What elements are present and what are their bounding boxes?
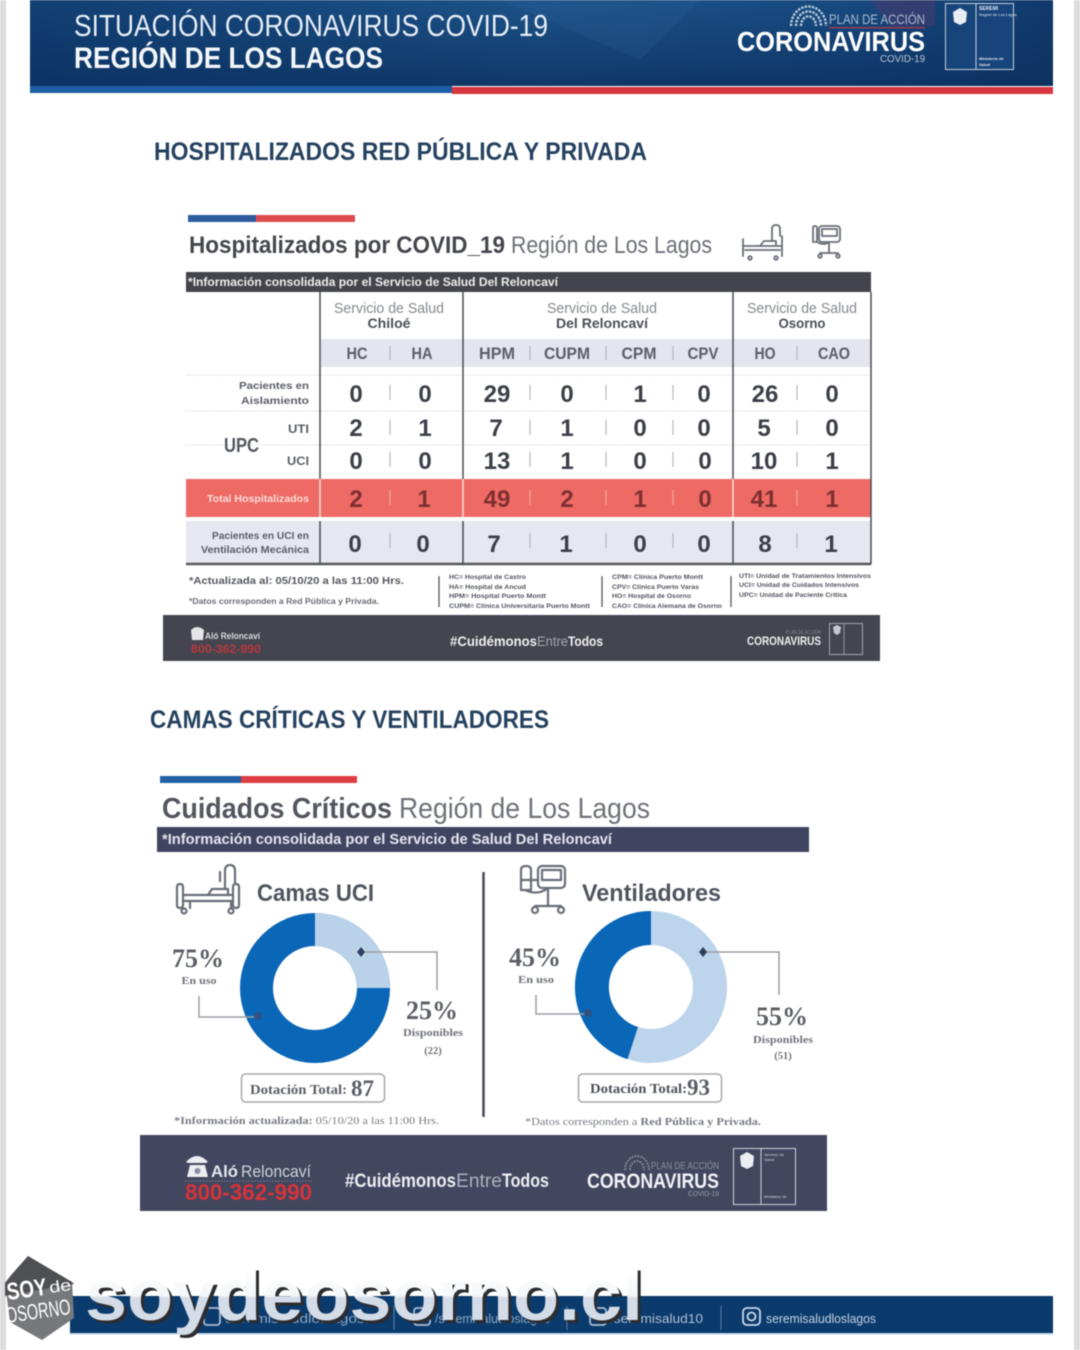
callout: 55% disponibles: Disponibles bbox=[753, 1035, 813, 1046]
row: total hospitalizados: 1 bbox=[633, 486, 647, 513]
column codes: CUPM bbox=[544, 344, 590, 363]
footer band: cuidados críticos: Todos bbox=[502, 1171, 549, 1192]
row: UTI: 1 bbox=[560, 415, 574, 442]
donut chart: ventiladores bbox=[575, 911, 710, 1059]
footer band: cuidados críticos: Salud bbox=[764, 1157, 774, 1162]
column header band bbox=[321, 339, 871, 367]
row: total hospitalizados: 1 bbox=[825, 486, 839, 513]
service headers: Servicio de Salud bbox=[334, 300, 444, 317]
callout: 55% disponibles: (51) bbox=[774, 1051, 792, 1062]
panel title: Cuidados Críticos bbox=[162, 793, 392, 825]
info bar bbox=[157, 827, 809, 852]
info bar: *Información consolidada por el Servicio de Salud Del Reloncaví bbox=[162, 832, 613, 848]
dotación total: ventiladores: 93 bbox=[687, 1075, 710, 1100]
icon: hospital bed bbox=[743, 225, 782, 260]
row: UCI: 1 bbox=[825, 448, 839, 475]
callout: 55% disponibles bbox=[699, 947, 813, 1062]
header logo: plan de acción coronavirus bbox=[737, 6, 925, 65]
callout: 25% disponibles: Disponibles bbox=[403, 1028, 463, 1039]
row: ventilación mecánica: 8 bbox=[758, 531, 772, 558]
heading: camas críticas: CAMAS CRÍTICAS Y VENTILADORES bbox=[150, 705, 549, 734]
column codes: CPM bbox=[622, 344, 656, 363]
header title: SITUACIÓN CORONAVIRUS COVID-19 bbox=[74, 8, 548, 43]
panel title: Región de Los Lagos bbox=[511, 232, 712, 259]
legend: abbreviations: HPM= Hospital Puerto Montt bbox=[449, 594, 546, 600]
row: UTI: 7 bbox=[489, 415, 503, 442]
callout: 25% disponibles: (22) bbox=[424, 1046, 442, 1057]
callout: 75% en uso bbox=[172, 944, 262, 1020]
legend: abbreviations: UCI= Unidad de Cuidados Intensivos bbox=[739, 583, 860, 589]
row: ventilación mecánica: Ventilación Mecánica bbox=[201, 545, 309, 556]
row: UTI bbox=[349, 415, 839, 442]
legend: abbreviations: HO= Hospital de Osorno bbox=[612, 594, 691, 600]
legend: abbreviations: CUPM= Clínica Universitaria Puerto Montt bbox=[449, 604, 590, 610]
footer band: cuidados críticos: 800-362-990 bbox=[185, 1179, 312, 1205]
header logo: ministerio de salud: Región de Los Lagos bbox=[979, 12, 1017, 17]
footer social bar: seremisaludloslagos bbox=[766, 1311, 876, 1326]
dotación total: ventiladores: Dotación Total: bbox=[590, 1082, 687, 1097]
row: ventilación mecánica: 1 bbox=[559, 531, 573, 558]
header logo: plan de acción coronavirus: COVID-19 bbox=[880, 54, 925, 65]
row: ventilación mecánica: 0 bbox=[416, 531, 430, 558]
legend: abbreviations: HC= Hospital de Castro bbox=[449, 575, 526, 581]
footer band: table: Entre bbox=[537, 634, 568, 649]
row labels: UTI bbox=[288, 422, 309, 436]
row: UCI: 0 bbox=[349, 448, 363, 475]
row: UCI: 0 bbox=[633, 448, 647, 475]
legend: abbreviations: CPM= Clínica Puerto Montt bbox=[612, 575, 703, 581]
footer band: table: CORONAVIRUS bbox=[747, 636, 821, 648]
row: UTI: 0 bbox=[633, 415, 647, 442]
footer band: cuidados críticos: PLAN DE ACCIÓN bbox=[651, 1159, 719, 1172]
accent rule bbox=[160, 776, 357, 783]
service headers: Chiloé bbox=[368, 315, 411, 331]
row: ventilación mecánica: 0 bbox=[348, 531, 362, 558]
logo: soy de osorno bbox=[4, 1256, 74, 1340]
row: UCI: 0 bbox=[698, 448, 712, 475]
legend: abbreviations: CAO= Clínica Alemana de Osorno bbox=[612, 604, 722, 610]
divider bbox=[482, 872, 485, 1117]
row labels: Aislamiento bbox=[241, 396, 309, 407]
callout: 45% en uso: En uso bbox=[518, 975, 554, 986]
info bar: *Información consolidada por el Servicio de Salud Del Reloncaví bbox=[188, 277, 559, 289]
panel title bbox=[162, 793, 650, 825]
row: total hospitalizados bbox=[186, 479, 871, 517]
icon: hospital bed bbox=[177, 865, 239, 914]
row: UTI: 0 bbox=[697, 415, 711, 442]
row: total hospitalizados: 2 bbox=[560, 486, 574, 513]
panel: hospitalizados table bbox=[163, 215, 880, 661]
footer social bar: /seremisalud10 bbox=[610, 1311, 703, 1326]
row: total hospitalizados: 49 bbox=[484, 486, 510, 513]
header logo: ministerio de salud bbox=[946, 4, 1017, 70]
header title: REGIÓN DE LOS LAGOS bbox=[74, 41, 383, 75]
column codes: HC bbox=[346, 344, 368, 363]
right page edge bbox=[1074, 0, 1080, 1350]
row: UTI: 5 bbox=[757, 415, 771, 442]
icons: social networks bbox=[204, 1308, 606, 1325]
icon: telephone bbox=[186, 1156, 208, 1177]
row: UCI: 13 bbox=[484, 448, 510, 475]
legend: abbreviations bbox=[439, 574, 872, 610]
row: pacientes en aislamiento: 26 bbox=[752, 381, 778, 408]
row: UCI: 1 bbox=[560, 448, 574, 475]
footer band: cuidados críticos: Entre bbox=[456, 1171, 502, 1192]
callout: 55% disponibles: 55% bbox=[756, 1002, 808, 1031]
footer band: cuidados críticos: COVID-19 bbox=[688, 1191, 719, 1198]
logo: soy de osorno: SOY bbox=[5, 1274, 48, 1306]
callout: 45% en uso: 45% bbox=[509, 943, 561, 972]
footer social bar: /seremisaludloslagos bbox=[435, 1311, 550, 1326]
column codes: HO bbox=[754, 344, 776, 363]
panel title: Región de Los Lagos bbox=[399, 793, 650, 825]
header logo: ministerio de salud: SEREMI bbox=[979, 6, 999, 12]
footer band: table: Aló Reloncaví bbox=[205, 631, 260, 641]
service headers: Servicio de Salud bbox=[747, 300, 857, 317]
footer social bar bbox=[70, 1296, 1053, 1334]
column codes: HA bbox=[412, 344, 432, 363]
info bar bbox=[186, 272, 871, 292]
row: total hospitalizados: 2 bbox=[349, 486, 363, 513]
callout: 75% en uso: 75% bbox=[172, 944, 224, 973]
service headers: Servicio de Salud bbox=[547, 300, 657, 317]
row: pacientes en aislamiento: 0 bbox=[560, 381, 574, 408]
service headers: Del Reloncaví bbox=[556, 315, 649, 331]
footnotes bbox=[189, 576, 404, 606]
row: ventilación mecánica: Pacientes en UCI en bbox=[212, 531, 309, 542]
column codes: CAO bbox=[818, 344, 850, 363]
dotación total: ventiladores bbox=[578, 1074, 722, 1102]
heading: hospitalizados: HOSPITALIZADOS RED PÚBLICA Y PRIVADA bbox=[154, 136, 647, 166]
row: UTI: 1 bbox=[418, 415, 432, 442]
panel title: Hospitalizados por COVID_19 bbox=[189, 232, 505, 259]
donut chart: camas uci bbox=[256, 913, 390, 1046]
callout: 45% en uso bbox=[509, 943, 592, 1017]
service headers: Osorno bbox=[778, 315, 826, 331]
header title bbox=[74, 8, 548, 75]
dotación total: camas: 87 bbox=[351, 1076, 374, 1101]
logo: soy de osorno: OSORNO bbox=[4, 1294, 72, 1328]
callout: 75% en uso: En uso bbox=[182, 976, 216, 987]
row: UCI bbox=[349, 448, 839, 475]
dotación total: camas bbox=[242, 1074, 384, 1102]
row labels: Pacientes en bbox=[239, 381, 309, 392]
row labels: UCI bbox=[287, 454, 309, 468]
footer band: cuidados críticos: Reloncaví bbox=[241, 1162, 311, 1181]
accent rule bbox=[188, 215, 355, 222]
footer social bar: seremisaludloslagos.cl bbox=[225, 1311, 380, 1326]
icon: ventilator bbox=[813, 226, 840, 258]
footer band: cuidados críticos bbox=[140, 1135, 827, 1211]
column codes: CPV bbox=[688, 344, 719, 363]
header logo: ministerio de salud: Salud bbox=[979, 62, 990, 67]
icon: instagram bbox=[743, 1308, 760, 1325]
label: ventiladores: Ventiladores bbox=[582, 880, 721, 907]
watermark: soydeosorno.cl: soydeosorno.cl bbox=[85, 1256, 643, 1336]
row: ventilación mecánica: 7 bbox=[487, 531, 501, 558]
legend: abbreviations: UTI= Unidad de Tratamientos Intensivos bbox=[739, 574, 872, 580]
icon: ventilator bbox=[521, 866, 565, 913]
column codes bbox=[346, 344, 850, 363]
footnotes: *Datos corresponden a Red Pública y Privada. bbox=[189, 597, 379, 606]
row: pacientes en aislamiento: 0 bbox=[825, 381, 839, 408]
row: pacientes en aislamiento: 0 bbox=[418, 381, 432, 408]
footer band: table: #Cuidémonos bbox=[450, 634, 537, 649]
panel title bbox=[189, 232, 712, 259]
row: UCI: 0 bbox=[418, 448, 432, 475]
row labels: UPC bbox=[224, 435, 259, 457]
row: UTI: 0 bbox=[825, 415, 839, 442]
footer band: table: Todos bbox=[568, 634, 603, 649]
legend: abbreviations: HA= Hospital de Ancud bbox=[449, 585, 526, 591]
row: total hospitalizados: 0 bbox=[698, 486, 712, 513]
footer band: cuidados críticos: Ministerio de bbox=[764, 1194, 787, 1199]
row labels bbox=[224, 381, 309, 468]
column codes: HPM bbox=[479, 344, 515, 363]
header banner bbox=[30, 0, 1053, 94]
row: pacientes en aislamiento: 1 bbox=[633, 381, 647, 408]
row: total hospitalizados: 41 bbox=[751, 486, 777, 513]
service headers bbox=[334, 300, 857, 331]
footer band: cuidados críticos: CORONAVIRUS bbox=[587, 1170, 719, 1193]
dotación total: camas: Dotación Total: bbox=[250, 1083, 347, 1098]
row: pacientes en aislamiento bbox=[349, 381, 839, 408]
label: camas uci: Camas UCI bbox=[257, 880, 374, 907]
row: UTI: 2 bbox=[349, 415, 363, 442]
callout: 25% disponibles: 25% bbox=[406, 996, 458, 1025]
row: pacientes en aislamiento: 29 bbox=[484, 381, 510, 408]
legend: abbreviations: UPC= Unidad de Paciente Crítica bbox=[739, 593, 848, 599]
row: ventilación mecánica: 0 bbox=[697, 531, 711, 558]
panel: cuidados críticos bbox=[140, 776, 827, 1211]
row: total hospitalizados: 1 bbox=[417, 486, 431, 513]
row: total hospitalizados: Total Hospitalizados bbox=[207, 494, 309, 505]
footer band: table: 800-362-990 bbox=[191, 642, 261, 656]
callout: 25% disponibles bbox=[357, 947, 463, 1057]
header logo: plan de acción coronavirus: PLAN DE ACCIÓN bbox=[829, 11, 925, 27]
row: pacientes en aislamiento: 0 bbox=[697, 381, 711, 408]
footnotes: *Actualizada al: 05/10/20 a las 11:00 Hrs. bbox=[189, 576, 404, 587]
footer band: table bbox=[163, 615, 880, 661]
footnote: ventiladores: *Datos corresponden a Red Pública y Privada. bbox=[525, 1117, 761, 1128]
footer band: cuidados críticos: Aló bbox=[211, 1162, 238, 1181]
footer band: table: PLAN DE ACCIÓN bbox=[786, 629, 821, 636]
logo: soy de osorno: de bbox=[48, 1277, 72, 1297]
legend: abbreviations: CPV= Clínica Puerto Varas bbox=[612, 585, 700, 591]
watermark: soydeosorno.cl: soydeosorno.cl bbox=[88, 1259, 646, 1339]
row: ventilación mecánica: 0 bbox=[633, 531, 647, 558]
footer band: cuidados críticos: Servicio de bbox=[764, 1152, 785, 1157]
row: ventilación mecánica bbox=[186, 521, 871, 563]
header logo: ministerio de salud: Ministerio de bbox=[979, 56, 1004, 61]
footnote: camas: *Información actualizada: 05/10/20 a las 11:00 Hrs. bbox=[174, 1116, 439, 1127]
row: UCI: 10 bbox=[751, 448, 777, 475]
row: ventilación mecánica: 1 bbox=[824, 531, 838, 558]
left page edge bbox=[0, 0, 6, 1350]
row: pacientes en aislamiento: 0 bbox=[349, 381, 363, 408]
header logo: plan de acción coronavirus: CORONAVIRUS bbox=[737, 26, 925, 57]
footer band: cuidados críticos: #Cuidémonos bbox=[345, 1171, 456, 1192]
